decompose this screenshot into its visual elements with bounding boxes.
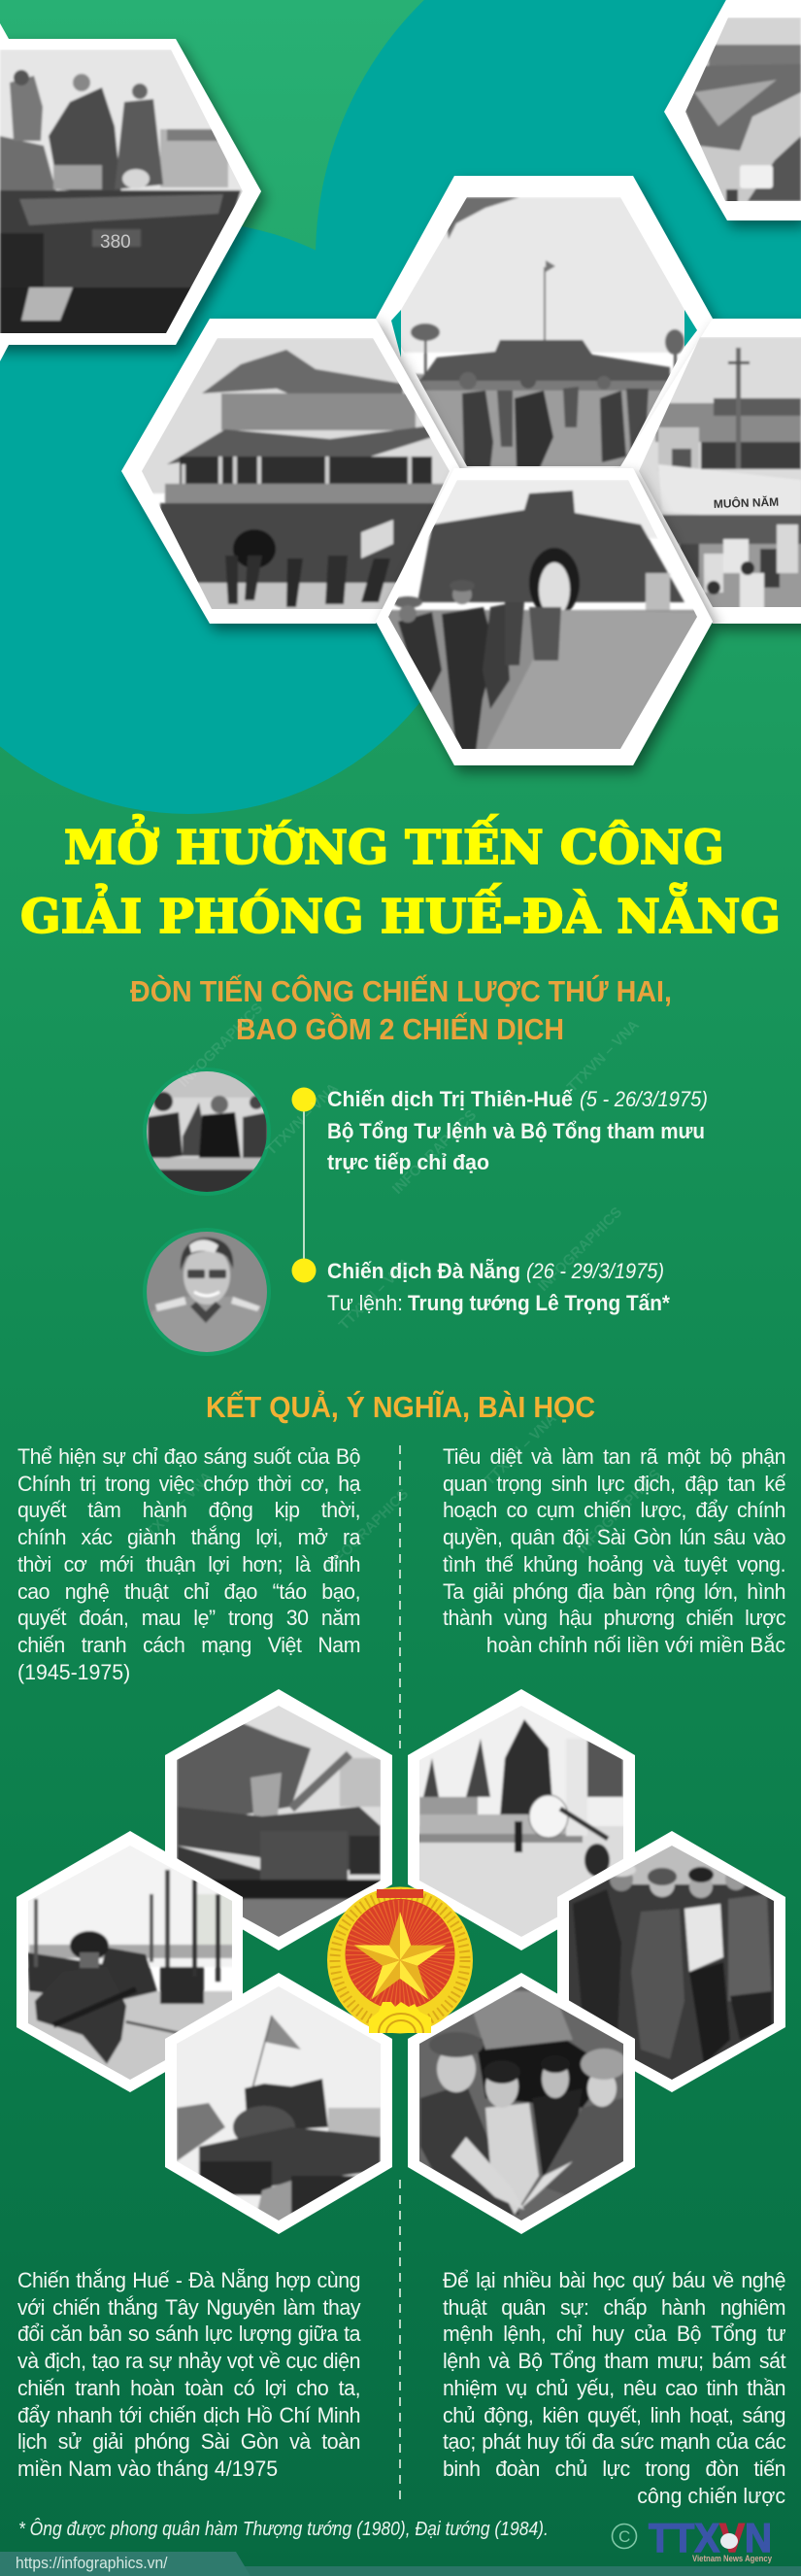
photo hexagon: banner street parade bbox=[617, 319, 801, 624]
text: lower left column: chiến tranh hoàn toàn có lợi cho ta, bbox=[17, 2376, 360, 2400]
title bbox=[20, 813, 781, 944]
text: results right column: Ta giải phóng địa bàn rộng lớn, hình bbox=[443, 1579, 785, 1604]
text: results left column bbox=[17, 1444, 361, 1684]
campaign 2 text: Chiến dịch Đà Nẵng bbox=[327, 1259, 520, 1283]
subtitle: BAO GỒM 2 CHIẾN DỊCH bbox=[236, 1011, 564, 1046]
photo hexagon: captured base gate bbox=[408, 1689, 635, 1950]
text: results right column bbox=[443, 1444, 786, 1657]
campaign 1 text: Bộ Tổng Tư lệnh và Bộ Tổng tham mưu bbox=[327, 1119, 705, 1143]
title: MỞ HƯỚNG TIẾN CÔNG bbox=[64, 813, 724, 875]
text: results left column: chính xác giành thắng lợi, mở ra bbox=[17, 1525, 360, 1549]
watermarks: INFOGRAPHICS bbox=[321, 1485, 412, 1576]
subtitle bbox=[130, 973, 672, 1046]
text: lower left column: đẩy nhanh tới chiến dịch Hồ Chí Minh bbox=[17, 2403, 360, 2427]
text: lower left column: và địch, tạo ra sự nhảy vọt về cục diện bbox=[17, 2349, 360, 2373]
watermarks: TTXVN – VNA bbox=[482, 1410, 560, 1489]
text: lower left column bbox=[17, 2268, 361, 2481]
emblem gear bbox=[369, 2002, 431, 2033]
timeline dot: Tri Thien-Hue bbox=[291, 1088, 317, 1111]
text: lower right column: Để lại nhiều bài học quý báu về nghệ bbox=[443, 2268, 785, 2292]
subtitle: ĐÒN TIẾN CÔNG CHIẾN LƯỢC THỨ HAI, bbox=[130, 973, 672, 1008]
text: lower right column: binh đoàn chủ lực trong đòn tiến bbox=[443, 2457, 785, 2481]
logo: TTXVN: TTXVN bbox=[649, 2515, 772, 2560]
text: results left column: quyết tâm hành động kịp thời, bbox=[17, 1498, 360, 1522]
logo: TTXVN: C bbox=[618, 2527, 630, 2546]
campaign 2 text: Trung tướng Lê Trọng Tấn* bbox=[408, 1291, 670, 1315]
portrait: Lieutenant General Le Trong Tan bbox=[143, 1228, 271, 1360]
emblem star bbox=[353, 1912, 447, 1999]
text: lower left column: với chiến thắng Tây Nguyên làm thay bbox=[17, 2295, 360, 2320]
watermarks: TTXVN – VNA bbox=[336, 1255, 415, 1334]
text: results right column: tình thế khủng hoảng và tuyệt vọng. bbox=[443, 1552, 785, 1576]
text: results left column: Thể hiện sự chỉ đạo sáng suốt của Bộ bbox=[17, 1444, 360, 1469]
photo hexagon: tank 380: 380 bbox=[100, 232, 131, 253]
footnote: * Ông được phong quân hàm Thượng tướng (1980), Đại tướng (1984). bbox=[18, 2519, 549, 2540]
text: results left column: (1945-1975) bbox=[17, 1660, 130, 1684]
watermarks: INFOGRAPHICS bbox=[535, 1203, 625, 1295]
campaign 1 text bbox=[327, 1087, 708, 1174]
text: results right column: hoàn chỉnh nối liền với miền Bắc bbox=[486, 1633, 785, 1657]
watermarks: TTXVN – VNA bbox=[263, 1080, 342, 1159]
photo hexagon: celebrating people bbox=[408, 1973, 635, 2234]
timeline connector bbox=[303, 1100, 305, 1271]
title: GIẢI PHÓNG HUẾ-ĐÀ NẴNG bbox=[20, 881, 781, 944]
text: results right column: Tiêu diệt và làm tan rã một bộ phận bbox=[443, 1444, 785, 1469]
text: results left column: quyết đoán, mau lẹ” trong 30 năm bbox=[17, 1606, 360, 1630]
campaign 2 text: Tư lệnh: bbox=[327, 1291, 403, 1315]
text: results right column: hoạch co cụm chiến lược, đẩy chính bbox=[443, 1498, 785, 1522]
text: lower right column: chủ động, kiên quyết, linh hoạt, sáng bbox=[443, 2403, 785, 2427]
photo hexagon: soldiers at citadel gate bbox=[376, 468, 713, 765]
watermarks: INFOGRAPHICS bbox=[389, 1106, 480, 1198]
background: teal circles bbox=[0, 0, 801, 814]
text: results left column: chiến tranh cách mạng Việt Nam bbox=[17, 1633, 360, 1657]
dashed divider bbox=[399, 1445, 401, 2506]
photo hexagon: soldier with rifle bbox=[17, 1831, 243, 2092]
campaign 1 text: (5 - 26/3/1975) bbox=[580, 1087, 708, 1111]
footer strip bbox=[0, 2552, 801, 2576]
section heading: KẾT QUẢ, Ý NGHĨA, BÀI HỌC bbox=[206, 1390, 595, 1424]
text: lower left column: miền Nam vào tháng 4/1975 bbox=[17, 2457, 278, 2481]
text: lower right column: thuật quân sự: chấp hành nghiêm bbox=[443, 2295, 785, 2320]
text: lower right column: công chiến lược bbox=[637, 2484, 785, 2508]
text: lower right column: tạo; phát huy tối đa sức mạnh của các bbox=[443, 2429, 785, 2454]
watermarks: TTXVN – VNA bbox=[137, 1469, 216, 1547]
watermarks: INFOGRAPHICS bbox=[176, 1000, 266, 1091]
text: results right column: quyền, quân đội Sài Gòn lún sâu vào bbox=[443, 1525, 785, 1549]
text: lower left column: đổi căn bản so sánh lực lượng giữa ta bbox=[17, 2322, 360, 2346]
source url: https://infographics.vn/ bbox=[16, 2554, 167, 2572]
photo hexagon: crowd on the road bbox=[664, 0, 801, 220]
watermarks: INFOGRAPHICS bbox=[574, 1466, 664, 1557]
watermarks bbox=[137, 1000, 664, 1576]
emblem: national army badge bbox=[327, 1886, 473, 2034]
campaign 2 text: (26 - 29/3/1975) bbox=[526, 1259, 664, 1283]
photo hexagon: Ngo Mon palace gate bbox=[121, 319, 461, 624]
text: results right column: thành vùng hậu phương chiến lược bbox=[443, 1606, 785, 1630]
campaign 1 text: Chiến dịch Trị Thiên-Huế bbox=[327, 1087, 574, 1111]
photo hexagon: tank with flag bbox=[165, 1973, 392, 2234]
text: lower right column: lệnh và Bộ Tổng tham mưu; bám sát bbox=[443, 2349, 785, 2373]
photo hexagon: tank 380 bbox=[0, 23, 261, 361]
text: results right column: quan trọng sinh lực địch, đập tan kế bbox=[443, 1472, 785, 1496]
portrait: command meeting bbox=[143, 1068, 271, 1199]
text: results left column: cao nghệ thuật chỉ đạo “táo bạo, bbox=[17, 1579, 360, 1604]
campaign 1 text: trực tiếp chỉ đạo bbox=[327, 1150, 489, 1174]
text: results left column: Chính trị trong việc chớp thời cơ, hạ bbox=[17, 1472, 360, 1496]
timeline dot: Da Nang bbox=[291, 1259, 317, 1282]
campaign 2 text bbox=[327, 1259, 670, 1315]
text: lower right column: mệnh lệnh, chỉ huy của Bộ Tổng tư bbox=[443, 2322, 785, 2346]
photo hexagon: banner street parade: MUÔN NĂM bbox=[714, 494, 779, 511]
photo hexagon: tank with soldiers bbox=[165, 1689, 392, 1950]
logo: TTXVN: Vietnam News Agency bbox=[692, 2554, 772, 2563]
text: lower left column: Chiến thắng Huế - Đà Nẵng hợp cùng bbox=[17, 2268, 360, 2292]
text: results left column: thời cơ mới thuận lợi hơn; là đỉnh bbox=[17, 1552, 360, 1576]
photo hexagon: flag tower of Hue citadel bbox=[376, 176, 713, 476]
text: lower left column: lịch sử giải phóng Sài Gòn và toàn bbox=[17, 2429, 360, 2454]
watermarks: TTXVN – VNA bbox=[564, 1017, 643, 1096]
text: lower right column: nhiệm vụ chủ yếu, nêu cao tinh thần bbox=[443, 2376, 785, 2400]
photo hexagon: group of soldiers bbox=[557, 1831, 785, 2092]
text: lower right column bbox=[443, 2268, 786, 2508]
